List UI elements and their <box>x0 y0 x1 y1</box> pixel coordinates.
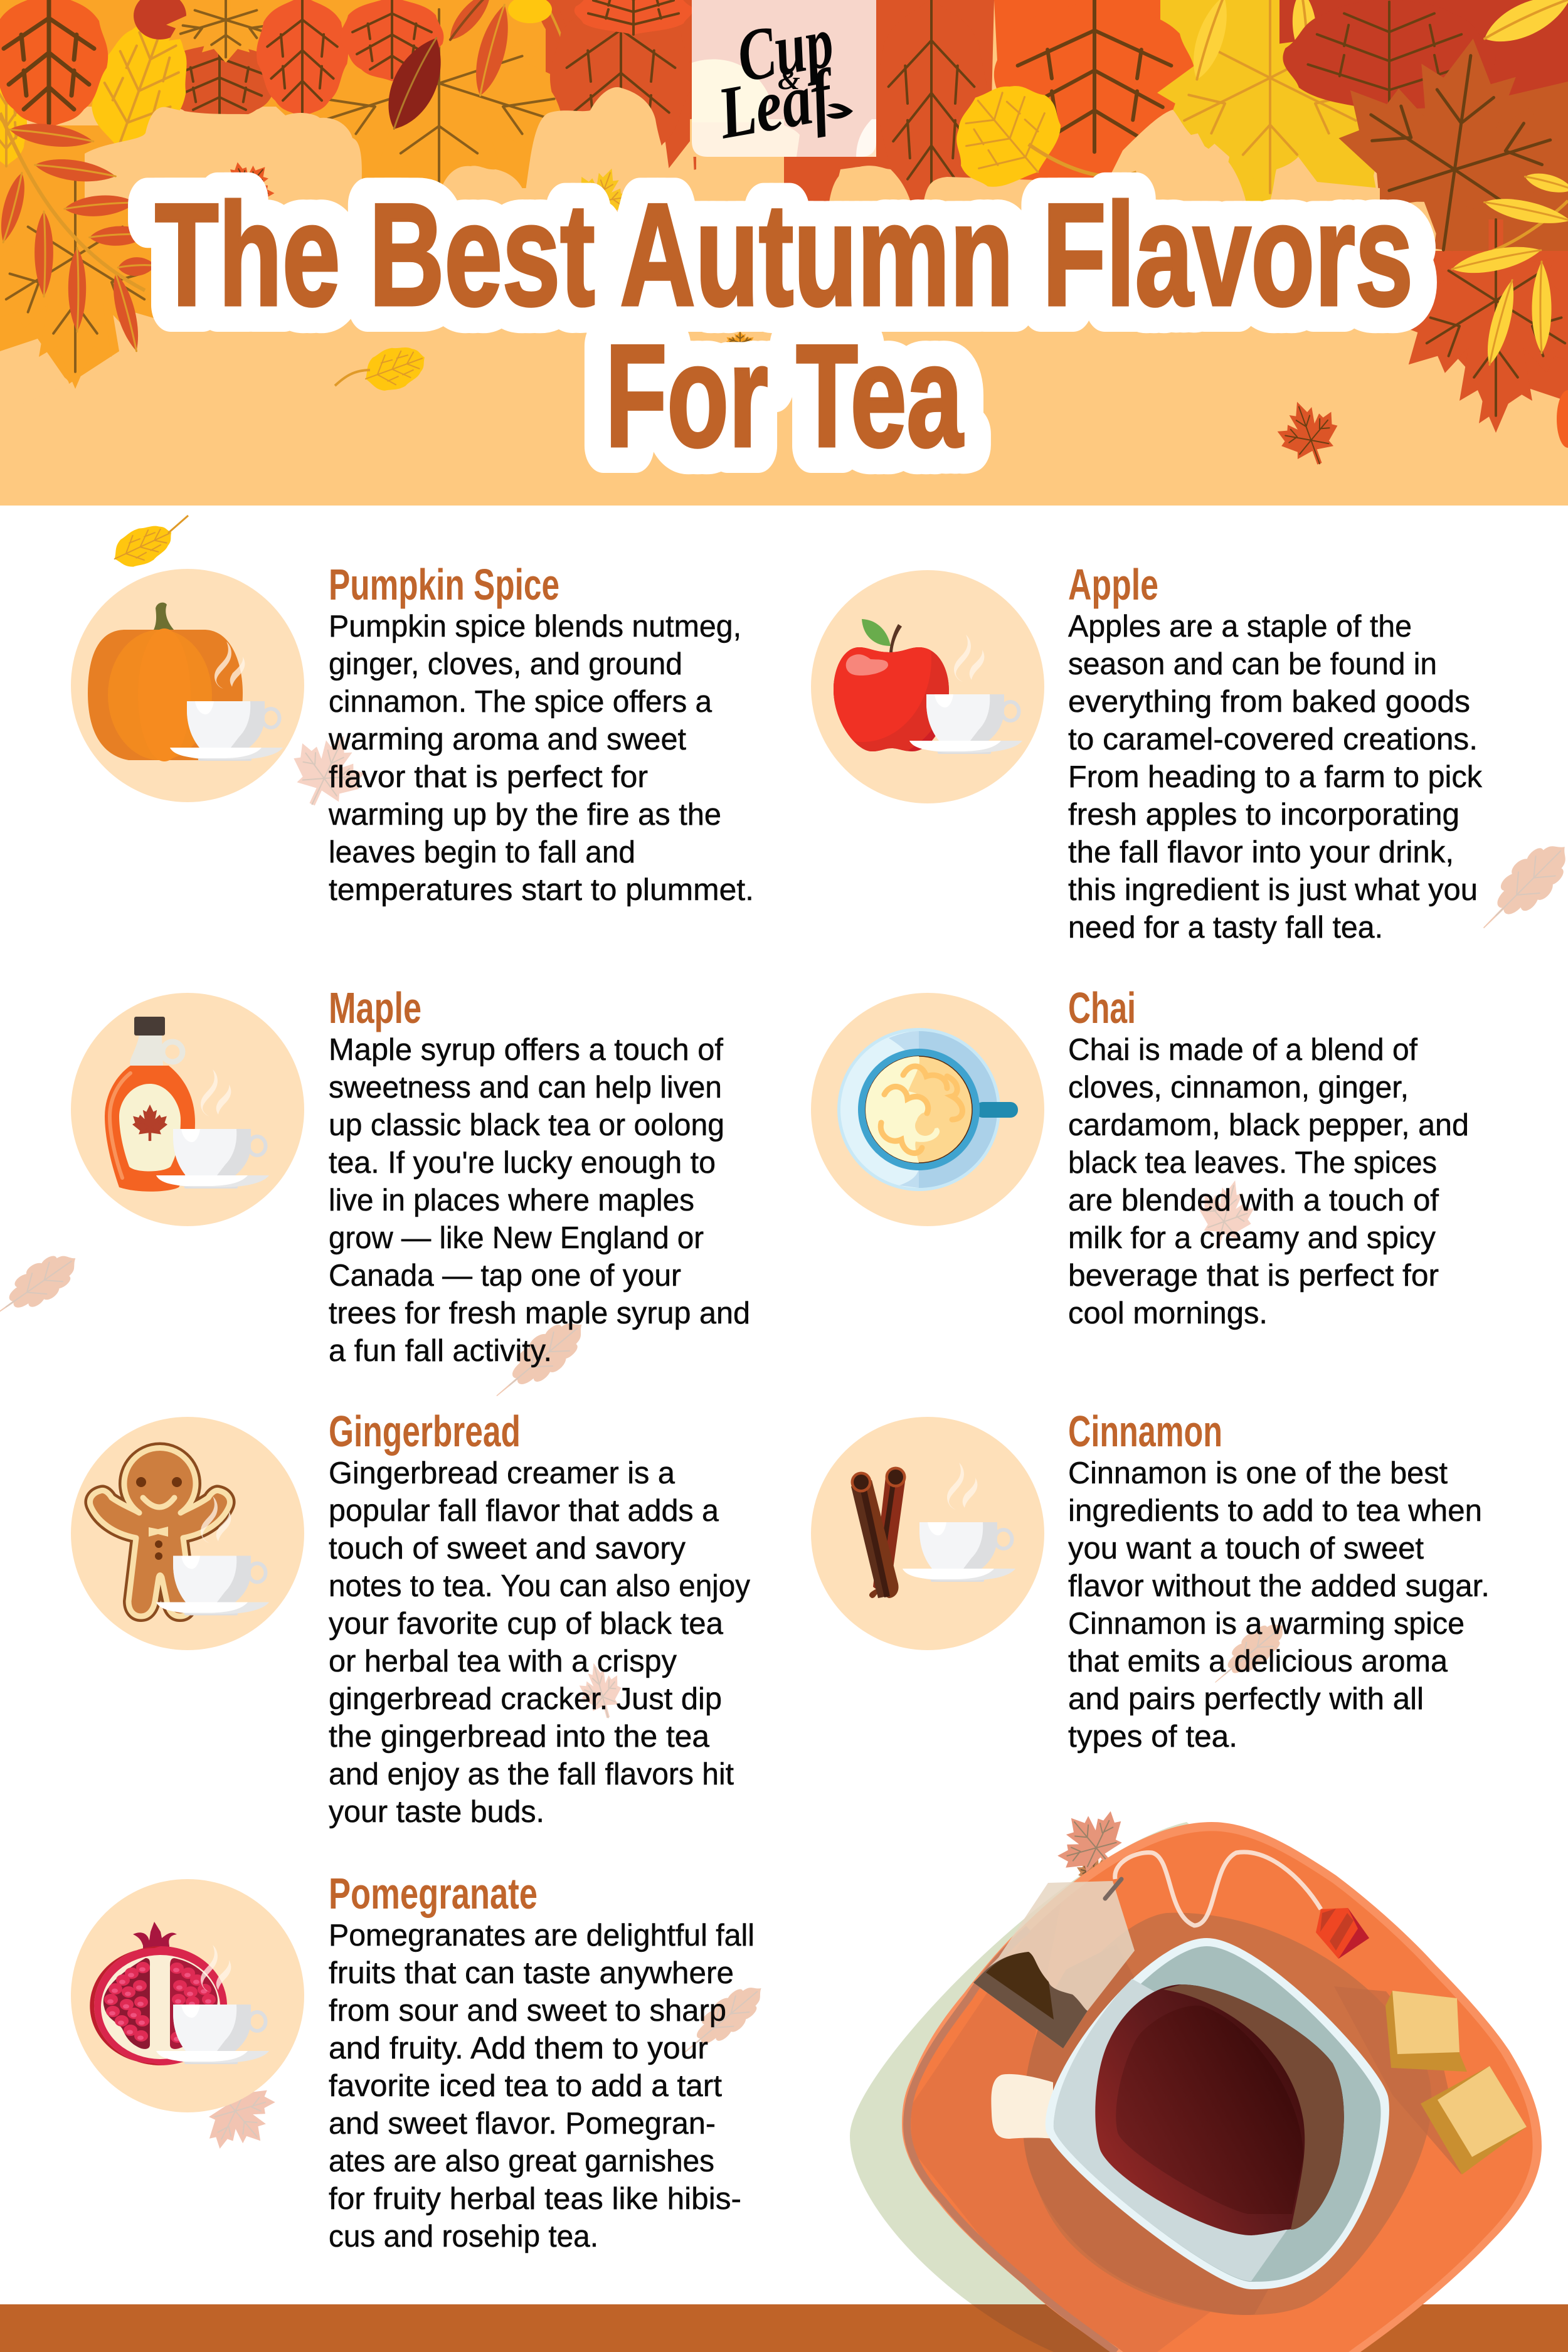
title text: For Tea <box>605 315 963 477</box>
text block: pomegranate: ates are also great garnishes <box>329 2144 714 2178</box>
logo panel <box>692 0 876 157</box>
logo leaf flourish <box>826 103 853 119</box>
text block: cinnamon: that emits a delicious aroma <box>1068 1645 1448 1678</box>
text block: chai: are blended with a touch of <box>1068 1184 1439 1217</box>
text block: cinnamon: and pairs perfectly with all <box>1068 1682 1424 1716</box>
text block: pomegranate: for fruity herbal teas like hibis- <box>329 2182 741 2216</box>
text block: pomegranate <box>329 1919 755 2254</box>
text block: apple: From heading to a farm to pick <box>1068 760 1482 794</box>
footer bar <box>0 2304 1568 2352</box>
text block: pomegranate: favorite iced tea to add a tart <box>329 2069 722 2103</box>
heading: gingerbread: Gingerbread <box>329 1407 521 1456</box>
autumn leaves collage <box>0 0 1568 433</box>
icon: pomegranate and tea cup <box>71 1879 304 2112</box>
text block: pumpkin spice: flavor that is perfect for <box>329 760 648 794</box>
text block: gingerbread: or herbal tea with a crispy <box>329 1645 677 1678</box>
text block: apple: Apples are a staple of the <box>1068 610 1412 644</box>
text block: pumpkin spice: cinnamon. The spice offers a <box>329 685 712 719</box>
text block: chai: beverage that is perfect for <box>1068 1259 1439 1293</box>
text block: chai: cloves, cinnamon, ginger, <box>1068 1071 1409 1104</box>
icon: cinnamon sticks and tea cup <box>811 1417 1044 1650</box>
header background <box>0 0 1568 506</box>
text block: maple: up classic black tea or oolong <box>329 1108 724 1142</box>
text block: gingerbread: and enjoy as the fall flavors hit <box>329 1757 734 1791</box>
tea bag string <box>1115 1852 1321 1926</box>
panel: cinnamon <box>811 1407 1490 1754</box>
title outline: For Tea <box>614 315 972 477</box>
heading: cinnamon: Cinnamon <box>1068 1407 1222 1456</box>
cup shadow <box>1025 1913 1431 2315</box>
green shadow <box>850 1822 1254 2352</box>
text block: pumpkin spice: leaves begin to fall and <box>329 835 635 869</box>
fallen leaves <box>1044 1795 1139 1890</box>
tea bag <box>973 1879 1135 2048</box>
tea cup on saucer illustration <box>0 1795 1568 2352</box>
cup handle <box>991 2074 1053 2139</box>
text block: apple: to caramel-covered creations. <box>1068 723 1478 756</box>
title <box>146 174 1422 477</box>
front leaves <box>0 1 1568 448</box>
shadow over footer <box>972 2304 1110 2352</box>
text block: maple: a fun fall activity. <box>329 1334 552 1368</box>
panel: gingerbread <box>71 1407 750 1829</box>
text block: pumpkin spice: warming aroma and sweet <box>328 723 686 756</box>
text block: cinnamon <box>1068 1456 1490 1754</box>
text block: maple: Maple syrup offers a touch of <box>329 1033 723 1067</box>
text block: pomegranate: and sweet flavor. Pomegran- <box>329 2107 716 2141</box>
heading: apple: Apple <box>1068 560 1158 609</box>
text block: pomegranate: Pomegranates are delightful fall <box>329 1919 755 1952</box>
text block: pomegranate: from sour and sweet to sharp <box>329 1994 726 2028</box>
text block: pumpkin spice: ginger, cloves, and ground <box>329 647 682 681</box>
text block: maple: tea. If you're lucky enough to <box>329 1146 716 1180</box>
text block: cinnamon: ingredients to add to tea when <box>1068 1494 1482 1528</box>
cup rim and interior <box>1046 1938 1389 2289</box>
text block: chai: black tea leaves. The spices <box>1068 1146 1437 1180</box>
text block: cinnamon: you want a touch of sweet <box>1068 1532 1424 1565</box>
title outline: For Tea <box>605 315 963 477</box>
text block: gingerbread: notes to tea. You can also enjoy <box>329 1569 750 1603</box>
text block: gingerbread: the gingerbread into the tea <box>329 1720 710 1754</box>
text block: maple: live in places where maples <box>329 1184 694 1217</box>
text block: gingerbread <box>329 1456 750 1829</box>
heading: maple: Maple <box>329 983 421 1032</box>
panel: chai <box>811 983 1469 1330</box>
logo <box>692 0 876 157</box>
text block: maple: trees for fresh maple syrup and <box>329 1296 750 1330</box>
heading: pumpkin spice: Pumpkin Spice <box>329 560 559 609</box>
icon: gingerbread man and tea cup <box>71 1417 304 1650</box>
text block: pumpkin spice: warming up by the fire as the <box>328 798 721 832</box>
text block: chai <box>1068 1033 1469 1330</box>
text block: cinnamon: types of tea. <box>1068 1720 1237 1754</box>
text block: gingerbread: popular fall flavor that adds a <box>329 1494 719 1528</box>
sugar cubes <box>1385 1991 1527 2175</box>
text block: apple <box>1068 610 1482 945</box>
panel: maple <box>71 983 750 1368</box>
text block: gingerbread: touch of sweet and savory <box>329 1532 686 1565</box>
text block: cinnamon: Cinnamon is one of the best <box>1068 1456 1448 1490</box>
icon: pumpkin and tea cup <box>71 569 304 802</box>
header banner <box>0 0 1568 506</box>
text block: apple: fresh apples to incorporating <box>1068 798 1459 832</box>
logo wordmark: & <box>778 63 800 95</box>
text block: cinnamon: flavor without the added sugar. <box>1068 1569 1490 1603</box>
red tag <box>1316 1908 1369 1959</box>
logo wordmark: Leaf <box>711 53 843 155</box>
text block: gingerbread: your favorite cup of black tea <box>329 1607 724 1641</box>
text block: gingerbread: Gingerbread creamer is a <box>329 1456 675 1490</box>
heading: chai: Chai <box>1068 983 1136 1032</box>
text block: maple <box>329 1033 750 1368</box>
title outline <box>146 174 1422 477</box>
text block: apple: everything from baked goods <box>1068 685 1470 719</box>
text block: chai: milk for a creamy and spicy <box>1068 1221 1436 1255</box>
text block: pumpkin spice: Pumpkin spice blends nutmeg, <box>329 610 741 644</box>
icon: apple and tea cup <box>793 570 1044 803</box>
text block: gingerbread: your taste buds. <box>329 1795 544 1829</box>
text block: apple: season and can be found in <box>1068 647 1437 681</box>
saucer <box>902 1822 1542 2352</box>
text block: chai: cool mornings. <box>1068 1296 1268 1330</box>
falling leaves in header <box>218 151 1348 474</box>
text block: apple: need for a tasty fall tea. <box>1068 911 1383 945</box>
text block: pomegranate: and fruity. Add them to your <box>329 2032 708 2065</box>
panel: pomegranate <box>71 1869 755 2254</box>
faded background leaves <box>0 721 1568 2165</box>
icon: chai cup from above <box>811 993 1044 1226</box>
text block: pomegranate: cus and rosehip tea. <box>329 2220 598 2254</box>
text block: pumpkin spice: temperatures start to plummet. <box>329 873 754 907</box>
panel: pumpkin spice <box>71 560 754 907</box>
title text <box>155 174 1413 477</box>
panel: apple <box>793 560 1482 945</box>
tea surface <box>1095 1984 1344 2235</box>
text block: apple: this ingredient is just what you <box>1068 873 1478 907</box>
text block: maple: sweetness and can help liven <box>329 1071 722 1104</box>
text block: cinnamon: Cinnamon is a warming spice <box>1068 1607 1465 1641</box>
logo wordmark <box>711 0 843 155</box>
text block: maple: grow — like New England or <box>329 1221 704 1255</box>
text block: apple: the fall flavor into your drink, <box>1068 835 1454 869</box>
icon: falling yellow leaf <box>107 516 188 575</box>
text block: pomegranate: fruits that can taste anywhere <box>329 1956 734 1990</box>
text block: gingerbread: gingerbread cracker. Just dip <box>329 1682 722 1716</box>
heading: pomegranate: Pomegranate <box>329 1869 538 1918</box>
cream scalloped shapes <box>0 59 1380 414</box>
text block: pumpkin spice <box>328 610 754 907</box>
title outline: For Tea <box>596 315 955 477</box>
text block: maple: Canada — tap one of your <box>329 1259 681 1293</box>
text block: chai: Chai is made of a blend of <box>1068 1033 1417 1067</box>
icon: maple syrup bottle and tea cup <box>71 993 304 1226</box>
text block: chai: cardamom, black pepper, and <box>1068 1108 1469 1142</box>
